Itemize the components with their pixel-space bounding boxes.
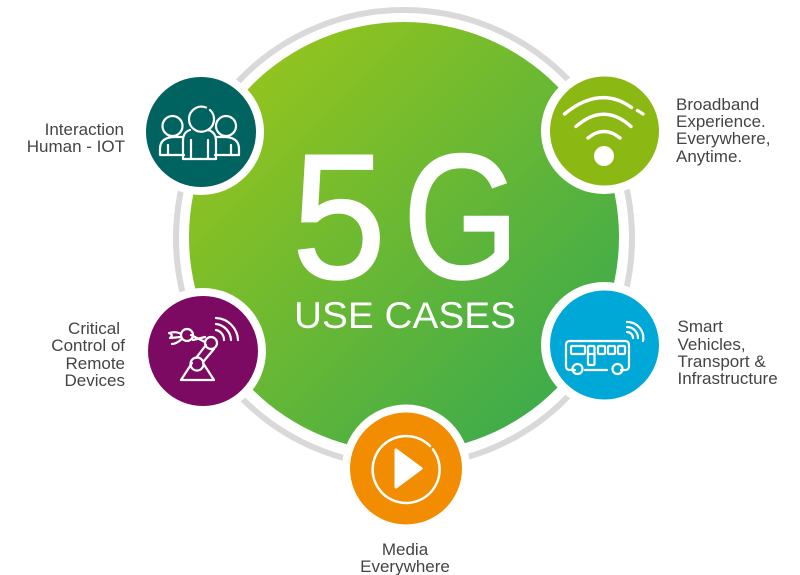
label: smart vehicles: Vehicles, [678,335,746,354]
label: media: Media [382,540,429,559]
icon: people [160,107,239,159]
node: broadband [541,68,667,194]
title: 5G: G [403,117,519,316]
icon: play button [373,436,440,503]
node: interaction human IOT [138,69,264,195]
label: broadband: Anytime. [676,147,742,166]
icon: bus [566,322,643,374]
node: smart vehicles [541,282,667,408]
node: media [342,404,470,532]
label: smart vehicles: Infrastructure [678,369,778,388]
label: critical control: Control of [51,336,125,355]
label: smart vehicles: Smart [678,317,723,336]
subtitle: use cases: USE CASES [294,295,516,336]
label: broadband: Experience. [676,112,766,131]
outer grey ring [176,10,632,466]
central green circle [189,22,619,452]
label: smart vehicles: Transport & [678,352,766,371]
icon: wifi [564,98,643,166]
label: broadband: Broadband [676,95,759,114]
label: critical control: Devices [65,371,125,390]
node: critical control [140,288,266,414]
label: broadband: Everywhere, [676,129,770,148]
title: 5G [292,117,519,316]
label: critical control: Remote [65,354,125,373]
label: interaction: Interaction [45,120,124,139]
label: interaction: Human - IOT [27,137,125,156]
label: critical control: Critical [68,319,120,338]
title: 5G: 5 [292,117,386,316]
icon: robot arm [169,318,238,380]
